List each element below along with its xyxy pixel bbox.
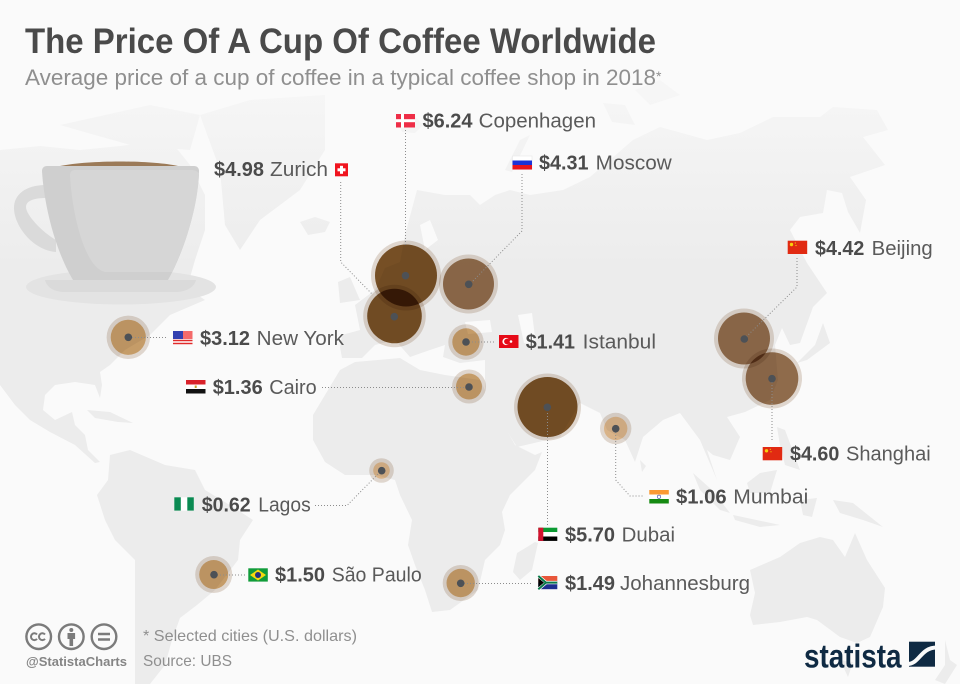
label: Lagos: $0.62 (202, 495, 251, 517)
bubble: Moscow (439, 254, 498, 314)
bubble: New York (107, 316, 150, 359)
label: Beijing (788, 238, 933, 260)
bubble: Lagos (369, 458, 394, 483)
label: New York: $3.12 (200, 328, 250, 350)
label: Zurich: $4.98 (214, 159, 264, 181)
label: Shanghai: Shanghai (846, 444, 931, 466)
label: Lagos (174, 495, 311, 517)
label: Istanbul: $1.41 (526, 331, 575, 353)
subtitle: * (656, 68, 662, 84)
bubble: Mumbai (600, 413, 631, 444)
title: The Price Of A Cup Of Coffee Worldwide (25, 22, 656, 61)
label: Zurich: Zurich (270, 159, 328, 181)
leader lines (132, 130, 797, 584)
label: Dubai: $5.70 (565, 525, 615, 547)
label: Istanbul (499, 331, 656, 353)
bubble: Shanghai (742, 348, 802, 408)
label: New York (173, 328, 345, 350)
bubble: Dubai (514, 374, 581, 440)
label: Copenhagen (396, 110, 596, 132)
credit handle: @StatistaCharts (26, 654, 127, 669)
label: Lagos: Lagos (258, 495, 311, 517)
label: Mumbai: $1.06 (676, 486, 727, 508)
label: Sao Paulo: São Paulo (332, 565, 422, 587)
label: Shanghai: $4.60 (790, 444, 839, 466)
label: Cairo: $1.36 (213, 377, 263, 399)
icon: coffee cup (14, 162, 216, 304)
bubble: Cairo (452, 370, 486, 404)
label: Istanbul: Istanbul (583, 331, 656, 353)
bubble: Johannesburg (443, 565, 479, 601)
footnote: * Selected cities (U.S. dollars) (143, 628, 357, 645)
statista logo: statista (804, 638, 902, 674)
label: Sao Paulo: $1.50 (275, 565, 325, 587)
bubble: Zurich (363, 285, 426, 347)
label: Moscow (512, 152, 672, 174)
subtitle: Average price of a cup of coffee in a typical coffee shop in 2018 (25, 65, 656, 90)
label: Dubai (538, 525, 675, 547)
label: Copenhagen: $6.24 (422, 110, 473, 132)
bubble: Beijing (714, 308, 774, 368)
label: Shanghai (763, 444, 931, 466)
icons: creative commons licence (26, 624, 116, 649)
bubble: Istanbul (448, 324, 484, 360)
label: Cairo: Cairo (269, 377, 317, 399)
label: Johannesburg: Johannesburg (620, 573, 750, 595)
label: Johannesburg (538, 573, 750, 595)
label: Johannesburg: $1.49 (565, 573, 615, 595)
label: Sao Paulo (248, 565, 422, 587)
label: Moscow: $4.31 (539, 152, 588, 174)
bubble: Sao Paulo (195, 556, 232, 593)
label: Dubai: Dubai (622, 525, 675, 547)
source: Source: UBS (143, 653, 232, 670)
label: Copenhagen: Copenhagen (479, 110, 596, 132)
label: Beijing: Beijing (872, 238, 933, 260)
label: Mumbai: Mumbai (733, 486, 808, 508)
label: Beijing: $4.42 (815, 238, 864, 260)
label: Mumbai (649, 486, 808, 508)
label: Moscow: Moscow (596, 152, 672, 174)
label: New York: New York (257, 328, 345, 350)
label: Cairo (186, 377, 317, 399)
bubble centre dots (124, 272, 776, 587)
label: Zurich (214, 159, 348, 181)
bubble: Copenhagen (371, 240, 441, 310)
